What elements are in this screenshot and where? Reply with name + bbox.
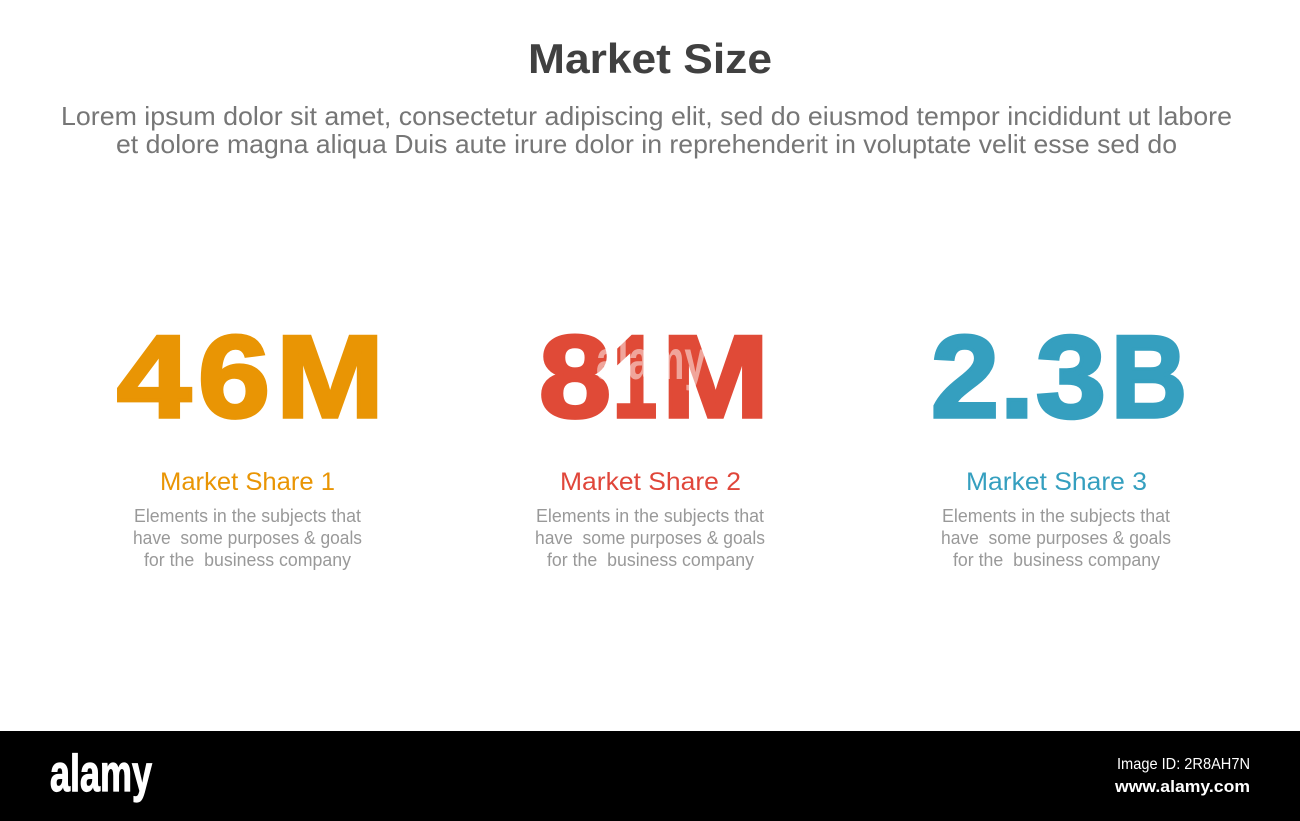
number: 2.3B: . — [1000, 311, 1034, 442]
number: 46M: 6 — [198, 311, 270, 442]
panel: market share 2 — [535, 311, 769, 570]
number: 2.3B: 2 — [931, 311, 999, 442]
description 1: for the business company — [144, 549, 352, 570]
number: 81M — [539, 311, 769, 442]
subtitle text block: et dolore magna aliqua Duis aute irure dolor in reprehenderit in voluptate velit esse sed do — [116, 129, 1177, 159]
number: 81M: 1 — [613, 311, 657, 442]
number: 46M — [117, 311, 384, 442]
panel: market share 1 — [117, 311, 384, 570]
number: 81M: M — [662, 311, 769, 442]
description 1: have some purposes & goals — [133, 527, 362, 548]
label: market share 2: Market Share 2 — [560, 468, 741, 496]
description 2: Elements in the subjects that — [536, 505, 764, 526]
subtitle text block: Lorem ipsum dolor sit amet, consectetur adipiscing elit, sed do eiusmod tempor incididunt ut labore — [61, 101, 1232, 131]
description 3 — [941, 505, 1171, 570]
number: 2.3B: 3 — [1036, 311, 1106, 442]
label: market share 3: Market Share 3 — [966, 468, 1147, 496]
image id: Image ID: 2R8AH7N — [1117, 756, 1250, 773]
description 2: for the business company — [547, 549, 755, 570]
description 2: have some purposes & goals — [535, 527, 765, 548]
title: Market Size — [528, 35, 772, 82]
description 1: Elements in the subjects that — [134, 505, 361, 526]
faint watermark over the middle number: alamy — [596, 328, 706, 391]
description 2 — [535, 505, 765, 570]
description 3: Elements in the subjects that — [942, 505, 1170, 526]
description 3: for the business company — [953, 549, 1161, 570]
panel: market share 3 — [931, 311, 1187, 570]
number: 2.3B — [931, 311, 1187, 442]
description 3: have some purposes & goals — [941, 527, 1171, 548]
description 1 — [133, 505, 362, 570]
number: 2.3B: B — [1111, 311, 1187, 442]
footer bar — [0, 731, 1300, 821]
number: 46M: M — [276, 311, 384, 442]
number: 46M: 4 — [117, 311, 191, 442]
label: market share 1: Market Share 1 — [160, 468, 335, 496]
website: www.alamy.com — [1114, 777, 1250, 796]
number: 81M: 8 — [539, 311, 611, 442]
footer logo: alamy — [50, 745, 152, 803]
subtitle text block — [61, 101, 1232, 159]
